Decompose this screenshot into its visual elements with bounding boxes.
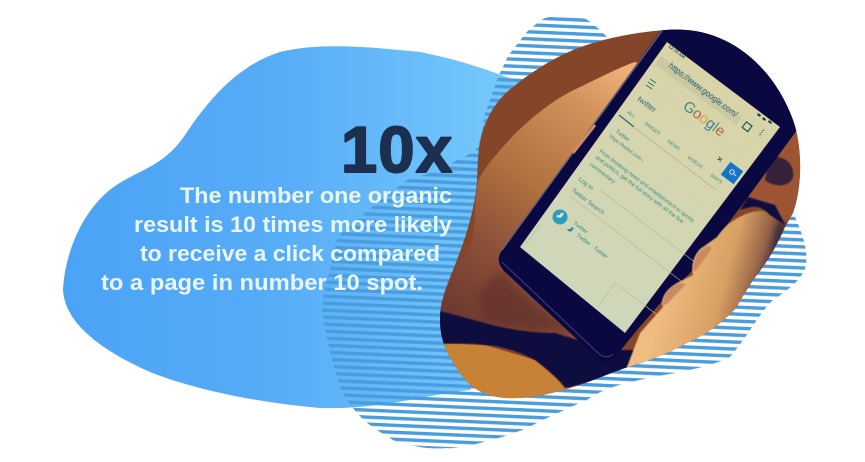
lower card outlines [525,224,660,317]
tabs: NEWS [666,139,681,152]
tab icon and menu [742,122,752,132]
striped blob [322,16,806,448]
twitter result: Twitter [572,221,589,236]
result text: Log in [577,176,595,192]
status icons [757,113,772,124]
text line 4: to a page in number 10 spot. [101,270,423,295]
phone body [498,30,796,351]
dark sleeve [436,310,660,388]
phone screen [520,42,780,333]
search button [721,162,743,184]
blue background blob [63,46,540,408]
clear x: × [715,154,725,165]
screen contents: ⋮ [756,126,768,138]
body text [101,183,452,295]
side button [573,125,595,153]
screen contents: Twitter · Twitter [575,233,609,260]
result text [570,129,700,288]
result text: and politics, get the full story with all the live [594,155,684,225]
result text: From breaking news and entertainment to sports [598,149,695,224]
tabs: MAPS [709,173,723,186]
result text: Twitter Search [570,187,606,217]
shadow over fingers [740,197,785,225]
twitter avatar [552,210,568,224]
tabs: VIDEOS [686,155,704,171]
tabs [626,110,723,186]
google logo: Google [680,98,728,140]
result text: Twitter [614,129,631,144]
wood table [440,30,800,398]
result text: https://twitter.com › [608,134,645,164]
search query: twitter [636,94,659,115]
dark finger behind phone [765,157,793,185]
screen contents [525,44,772,317]
photo: hands holding phone showing Google search [440,30,800,398]
right hand [625,197,790,380]
tabs: ALL [626,110,636,120]
address bar [655,56,742,125]
url: https://www.google.com/ [667,61,740,119]
text line 1: The number one organic [180,183,452,208]
status bar: 12:15 AM [667,44,686,60]
tabs: IMAGES [643,121,661,137]
finger tips [663,246,712,306]
text line 3: to receive a click compared [140,241,440,266]
menu icon [646,79,656,89]
left hand [440,62,638,340]
heading: 10x: 10x [341,113,452,186]
result text: commentary [588,162,616,185]
text line 2: result is 10 times more likely [134,212,452,237]
